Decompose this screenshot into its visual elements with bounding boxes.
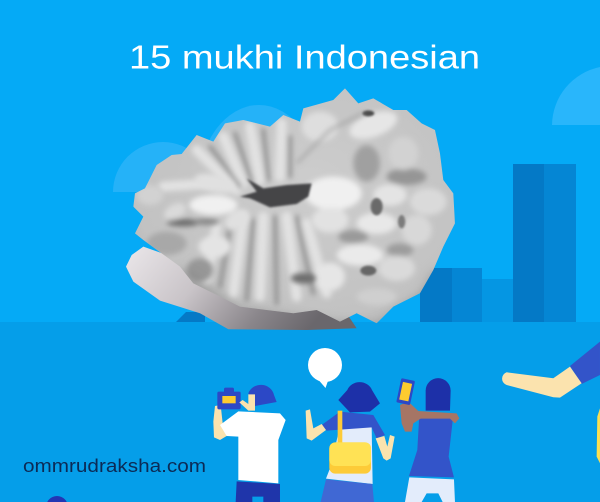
title: 15 mukhi Indonesian xyxy=(129,40,480,76)
decorative arc: right xyxy=(552,67,600,125)
top xyxy=(326,426,373,484)
right lobe bumps xyxy=(302,105,447,305)
bead pits xyxy=(360,110,405,276)
shirt xyxy=(409,415,454,477)
arm xyxy=(213,405,227,440)
speech bubble xyxy=(308,348,342,388)
connecting block xyxy=(482,279,513,322)
sleeve xyxy=(570,342,600,384)
head at bottom edge xyxy=(46,496,68,502)
trousers xyxy=(236,481,280,502)
bag xyxy=(329,442,371,474)
bag strap xyxy=(338,411,342,444)
arms xyxy=(306,409,395,461)
bead central groove xyxy=(240,178,312,207)
skirt xyxy=(321,479,374,502)
shirt xyxy=(220,411,286,483)
decorative arc: middle xyxy=(197,105,321,192)
bag edge xyxy=(597,408,600,463)
bottom edge shading xyxy=(182,268,432,323)
background: lower floor xyxy=(0,322,600,502)
website label: ommrudraksha.com xyxy=(23,455,206,476)
person with bag xyxy=(306,382,395,502)
bar chart backdrop xyxy=(176,164,576,322)
hair xyxy=(248,385,277,406)
person with camera xyxy=(213,385,286,502)
person at right edge xyxy=(502,342,600,463)
hair xyxy=(338,382,380,412)
left side lumps xyxy=(137,170,316,284)
left lobe ridges xyxy=(163,123,327,303)
people group xyxy=(213,378,459,502)
bead body xyxy=(133,88,455,324)
person with phone xyxy=(396,378,459,502)
hand xyxy=(239,394,255,411)
camera xyxy=(217,388,241,409)
background: upper sky xyxy=(0,0,600,323)
rudraksha bead photo xyxy=(126,83,460,340)
bar: tall xyxy=(513,164,576,322)
decorative arc: left xyxy=(113,142,213,192)
arm xyxy=(400,402,459,432)
sleeves xyxy=(322,412,385,438)
phone xyxy=(396,378,415,405)
bead shadow xyxy=(126,247,357,330)
bar: short xyxy=(420,268,482,322)
trousers xyxy=(405,477,455,502)
arm xyxy=(502,367,582,398)
block left of bead xyxy=(176,312,205,322)
hair xyxy=(426,378,451,411)
lobe seam xyxy=(297,113,363,163)
